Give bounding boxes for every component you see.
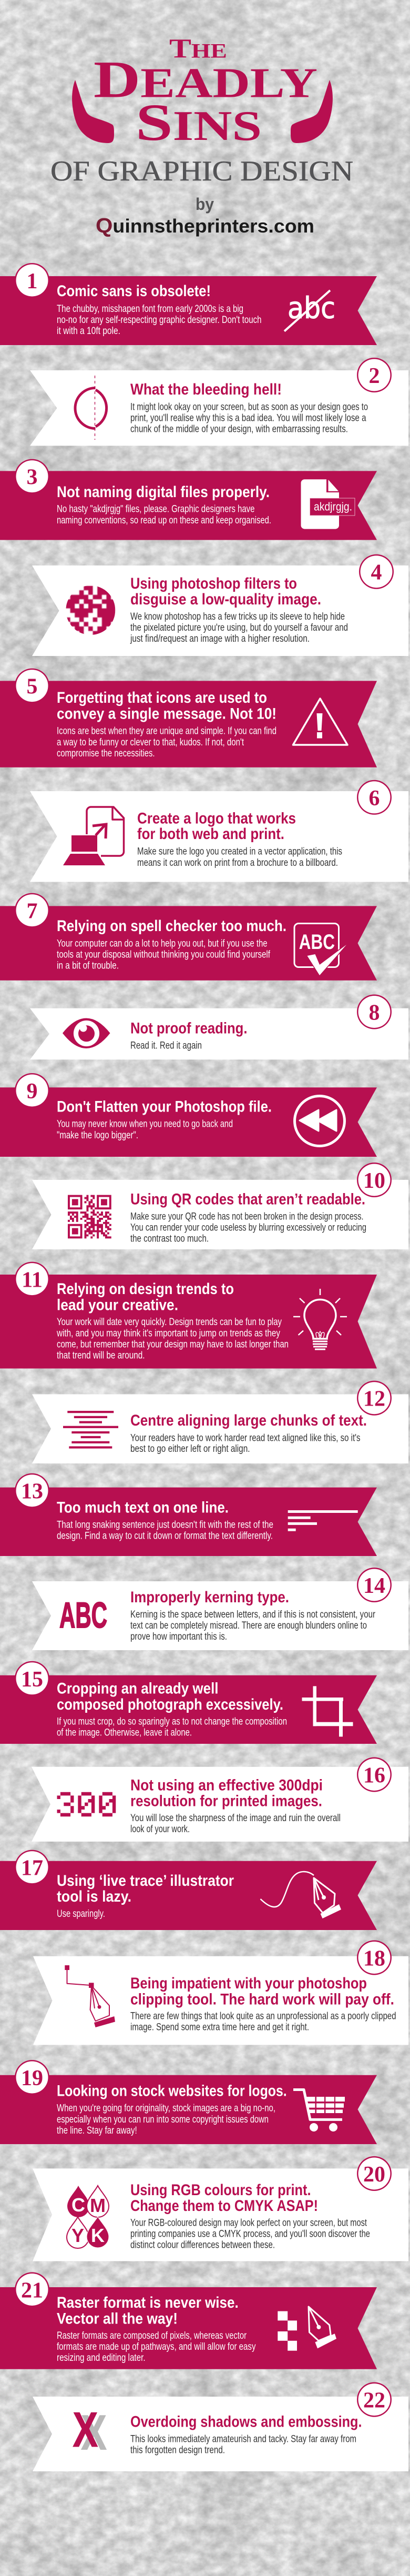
- heading: Centre aligning large chunks of text.: [130, 1412, 367, 1429]
- body text: Raster formats are composed of pixels, whereas vector: [57, 2330, 247, 2341]
- number badge: [359, 554, 394, 589]
- number badge: [15, 459, 49, 494]
- icon: CMYK ink drops: M: [90, 2195, 106, 2216]
- icon: centred text lines: [63, 1411, 118, 1449]
- panel: sin 16: [32, 1757, 408, 1842]
- icon: X with drop shadow: X: [81, 2405, 107, 2460]
- body text: [57, 2103, 275, 2136]
- body text: just find/request an image with a higher resolution.: [130, 633, 310, 644]
- body text: image. Spend some extra time here and get it right.: [130, 2022, 309, 2033]
- number badge: [357, 1163, 392, 1197]
- body text: [130, 401, 368, 435]
- number badge: [357, 1940, 392, 1975]
- heading: Using ‘live trace’ illustrator: [57, 1872, 234, 1890]
- heading: [57, 689, 276, 722]
- panel: sin 3: [0, 459, 377, 540]
- number badge: [15, 1473, 49, 1508]
- ribbon: [30, 1008, 408, 1059]
- subtitle: OF GRAPHIC DESIGN: [50, 155, 353, 187]
- byline: company: Quinnstheprinters.com: [96, 214, 314, 237]
- body text: tools at your disposal without thinking you could find yourself: [57, 948, 270, 960]
- panel: sin 17: [0, 1850, 377, 1930]
- icon: vector pen: [309, 2307, 336, 2348]
- body text: Use sparingly.: [57, 1908, 105, 1920]
- heading: Don't Flatten your Photoshop file.: [57, 1098, 272, 1115]
- ribbon: [0, 906, 377, 981]
- body text: design. Find a way to cut it down or format the text differently.: [57, 1530, 273, 1541]
- number badge: 11: [22, 1268, 43, 1292]
- panel: sin 22: [33, 2382, 408, 2471]
- number badge: 19: [21, 2066, 43, 2090]
- heading: Being impatient with your photoshop: [130, 1975, 367, 1992]
- heading: Not proof reading.: [130, 1019, 247, 1037]
- body text: formats are made up of pathways, and will allow for easy: [57, 2341, 256, 2352]
- body text: especially when you can run into some copyright issues down: [57, 2114, 269, 2125]
- icon: CMYK ink drops: K: [91, 2225, 105, 2246]
- number badge: 14: [363, 1574, 385, 1598]
- panel: sin 15: [0, 1661, 377, 1744]
- number badge: [15, 263, 49, 298]
- title: The: THE: [169, 34, 227, 64]
- body text: [130, 2433, 356, 2456]
- heading: Relying on spell checker too much.: [57, 917, 286, 935]
- number badge: 6: [369, 786, 380, 811]
- panel: sin 11: [0, 1262, 377, 1369]
- body text: [57, 1118, 233, 1141]
- heading: disguise a low-quality image.: [130, 591, 321, 608]
- icon: clipping pen path: [65, 1965, 115, 2027]
- body text: the line. Stay far away!: [57, 2125, 137, 2136]
- number badge: [357, 2156, 392, 2191]
- heading: composed photograph excessively.: [57, 1696, 283, 1713]
- body text: that trend will be around.: [57, 1350, 145, 1361]
- panel: sin 18: [33, 1940, 408, 2045]
- body text: Your computer can do a lot to help you out, but if you use the: [57, 937, 267, 949]
- body text: means it can work on print from a brochure to a billboard.: [137, 857, 338, 868]
- body text: No hasty "akdjrgjg" files, please. Graphic designers have: [57, 503, 254, 514]
- ribbon: [0, 1861, 377, 1930]
- ribbon: [0, 2287, 377, 2369]
- body text: it with a 10ft pole.: [57, 325, 120, 337]
- icon: monitor and document: [63, 807, 124, 865]
- body text: We know photoshop has a few tricks up its sleeve to help hide: [130, 611, 345, 622]
- icon: X with drop shadow: X: [73, 2402, 98, 2457]
- heading: Forgetting that icons are used to: [57, 689, 267, 706]
- ribbon: [30, 791, 408, 882]
- body text: [130, 2011, 396, 2033]
- heading: [57, 1280, 234, 1314]
- ribbon: [0, 1488, 377, 1556]
- body text: [57, 1519, 273, 1541]
- body text: [130, 611, 348, 644]
- icon: badly named file: akdjrgjg.: [314, 500, 352, 513]
- body text: with, and you may think it's important to jump on trends as they: [56, 1327, 280, 1339]
- body text: If you must crop, do so sparingly as to not change the composition: [57, 1716, 287, 1728]
- body text: You may never know when you need to go back and: [57, 1118, 233, 1129]
- heading: convey a single message. Not 10!: [57, 705, 276, 722]
- number badge: [357, 780, 392, 815]
- body text: [130, 2217, 370, 2251]
- number badge: 15: [21, 1668, 43, 1692]
- heading: [57, 2294, 239, 2327]
- panel: sin 10: [32, 1163, 408, 1249]
- heading: Vector all the way!: [57, 2310, 178, 2327]
- body text: distinct colour differences between these.: [130, 2239, 275, 2251]
- number badge: 21: [21, 2279, 43, 2303]
- heading: Using RGB colours for print.: [130, 2181, 311, 2199]
- icon: pixel 300: [57, 1794, 116, 1815]
- body text: no-no for any self-respecting graphic designer. Don't touch: [57, 314, 262, 326]
- ribbon: [32, 1394, 408, 1463]
- ribbon: [0, 471, 377, 540]
- heading: [130, 1776, 323, 1810]
- number badge: [357, 1757, 392, 1792]
- heading: [137, 810, 296, 843]
- icon: bleed circle: [75, 376, 107, 440]
- heading: for both web and print.: [137, 825, 284, 843]
- body text: Make sure the logo you created in a vector application, this: [137, 846, 342, 857]
- heading: Change them to CMYK ASAP!: [130, 2197, 318, 2215]
- icon: long text lines: [288, 1510, 358, 1531]
- ribbon: [0, 1087, 377, 1157]
- heading: [57, 1872, 234, 1905]
- number badge: [357, 1381, 392, 1416]
- icon: right horn: [291, 80, 333, 143]
- number badge: [357, 1568, 392, 1602]
- body text: [57, 503, 271, 526]
- heading: Relying on design trends to: [57, 1280, 234, 1298]
- panel: sin 21: [0, 2272, 377, 2369]
- panel: sin 6: [30, 780, 408, 882]
- body text: Read it. Red it again: [130, 1039, 202, 1051]
- heading: Using photoshop filters to: [130, 575, 297, 592]
- number badge: 8: [369, 1001, 380, 1025]
- body text: of the image. Otherwise, leave it alone.: [57, 1727, 192, 1739]
- number badge: [15, 1850, 49, 1885]
- icon: warning triangle: [293, 699, 347, 745]
- icon: badly kerned ABC: ABC: [59, 1595, 107, 1635]
- body text: chunk of the middle of your design, with embarrassing results.: [130, 423, 348, 435]
- ribbon: [0, 276, 377, 345]
- icon: pixelated image: [66, 588, 116, 633]
- number badge: [357, 2382, 392, 2417]
- number badge: [15, 1262, 49, 1297]
- ribbon: [32, 1180, 408, 1249]
- icon: CMYK ink drops: [67, 2186, 109, 2248]
- panel: sin 12: [32, 1381, 408, 1463]
- number badge: [15, 1661, 49, 1696]
- number badge: 1: [26, 269, 38, 294]
- heading: tool is lazy.: [57, 1888, 131, 1905]
- body text: [57, 303, 262, 337]
- body text: That long snaking sentence just doesn't fit with the rest of the: [57, 1519, 273, 1531]
- number badge: [15, 2272, 49, 2307]
- body text: this forgotten design trend.: [130, 2444, 225, 2456]
- panel: sin 14: [32, 1568, 408, 1650]
- body text: [57, 2330, 256, 2363]
- number badge: 4: [371, 561, 382, 585]
- heading: Improperly kerning type.: [130, 1589, 289, 1606]
- number badge: [15, 1073, 49, 1108]
- panel: sin 2: [30, 358, 408, 446]
- number badge: 7: [26, 900, 38, 924]
- number badge: [15, 669, 49, 703]
- body text: You will lose the sharpness of the image and ruin the overall: [130, 1812, 341, 1824]
- body text: look of your work.: [130, 1823, 190, 1835]
- body text: [130, 1812, 341, 1835]
- icon: pen tool with curve: [261, 1872, 341, 1918]
- number badge: 12: [363, 1387, 385, 1411]
- body text: [130, 1609, 375, 1642]
- heading: Create a logo that works: [137, 810, 296, 827]
- ribbon: [33, 1956, 408, 2045]
- title block: [50, 34, 353, 237]
- body text: the contrast too much.: [130, 1233, 209, 1245]
- heading: Not naming digital files properly.: [57, 483, 270, 501]
- panel: sin 5: [0, 669, 377, 767]
- heading: [130, 2181, 318, 2215]
- body text: [130, 1210, 366, 1245]
- number badge: [15, 2060, 49, 2095]
- body text: come, but remember that your design may have to last longer than: [57, 1339, 289, 1350]
- title: Sins: SINS: [136, 93, 262, 151]
- panel: sin 9: [0, 1073, 377, 1157]
- icon: raster pixels: [278, 2311, 297, 2351]
- heading: Not using an effective 300dpi: [130, 1776, 323, 1794]
- ribbon: [33, 2168, 408, 2261]
- icon: struck-through abc: abc: [288, 291, 335, 326]
- number badge: 5: [26, 675, 38, 699]
- title: Deadly: DEADLY: [94, 50, 317, 109]
- icon: left horn: [72, 80, 114, 143]
- icon: crop tool: [302, 1686, 353, 1736]
- ribbon: [32, 1767, 408, 1842]
- number badge: 3: [26, 466, 38, 490]
- panel: sin 1: [0, 263, 377, 345]
- number badge: 17: [21, 1856, 43, 1881]
- body text: When you're going for originality, stock images are a big no-no,: [57, 2103, 275, 2114]
- heading: Looking on stock websites for logos.: [57, 2082, 287, 2099]
- ribbon: [33, 2397, 408, 2471]
- icon: eye: [63, 1018, 110, 1048]
- body text: a way to be funny or clever to that, kudos. If not, don't: [57, 736, 244, 748]
- heading: What the bleeding hell!: [130, 381, 282, 398]
- body text: Your work will date very quickly. Design trends can be fun to play: [57, 1316, 282, 1328]
- icon: QR code: [68, 1196, 111, 1237]
- ribbon: [0, 681, 377, 767]
- icon: badly named file: [301, 479, 355, 529]
- ribbon: [0, 2075, 377, 2144]
- heading: [130, 575, 321, 608]
- body text: "make the logo bigger".: [57, 1129, 138, 1141]
- number badge: [15, 893, 49, 928]
- heading: [130, 1975, 394, 2008]
- body text: [57, 937, 270, 971]
- number badge: 2: [369, 364, 380, 388]
- number badge: [357, 358, 392, 392]
- number badge: 13: [21, 1480, 43, 1504]
- panel: sin 4: [32, 554, 408, 656]
- body text: prove how important this is.: [130, 1631, 227, 1642]
- heading: lead your creative.: [57, 1296, 178, 1314]
- body text: [130, 1432, 361, 1454]
- body text: resizing and editing later.: [57, 2352, 146, 2363]
- number badge: [357, 994, 392, 1029]
- body text: [57, 725, 276, 759]
- heading: Overdoing shadows and embossing.: [130, 2413, 362, 2430]
- panel: sin 7: [0, 893, 377, 981]
- panel: sin 8: [30, 994, 408, 1059]
- body text: in a bit of trouble.: [57, 959, 119, 971]
- body text: the pixelated picture you're using, but do yourself a favour and: [130, 622, 348, 633]
- body text: [57, 1716, 287, 1739]
- number badge: 10: [363, 1169, 385, 1193]
- number badge: 20: [363, 2163, 385, 2187]
- panel: sin 20: [33, 2156, 408, 2261]
- ribbon: [30, 370, 408, 446]
- icon: shopping cart: [293, 2089, 345, 2131]
- panel: sin 19: [0, 2060, 377, 2144]
- icon: CMYK ink drops: C: [71, 2194, 85, 2216]
- heading: Raster format is never wise.: [57, 2294, 239, 2311]
- body text: [56, 1316, 289, 1361]
- heading: Cropping an already well: [57, 1680, 219, 1697]
- heading: Comic sans is obsolete!: [57, 282, 211, 300]
- body text: [137, 846, 342, 868]
- ribbon: [0, 1675, 377, 1744]
- number badge: 22: [363, 2389, 385, 2413]
- body text: naming conventions, so read up on these and keep organised.: [57, 514, 271, 526]
- heading: Too much text on one line.: [57, 1499, 229, 1516]
- number badge: 9: [26, 1079, 38, 1104]
- icon: light bulb: [293, 1289, 347, 1349]
- body text: The chubby, misshapen font from early 2000s is a big: [57, 303, 243, 315]
- icon: spell check: ABC: [299, 931, 335, 954]
- ribbon: [32, 1581, 408, 1650]
- number badge: 18: [363, 1946, 385, 1971]
- heading: Using QR codes that aren’t readable.: [130, 1190, 365, 1208]
- icon: CMYK ink drops: Y: [71, 2225, 84, 2246]
- number badge: 16: [363, 1763, 385, 1787]
- ribbon: [0, 1275, 377, 1369]
- panel: sin 13: [0, 1473, 377, 1556]
- heading: [57, 1680, 283, 1713]
- body text: compromise the necessities.: [57, 747, 155, 759]
- body text: Icons are best when they are unique and simple. If you can find: [57, 725, 276, 736]
- body text: best to go either left or right align.: [130, 1443, 250, 1454]
- icon: spell check: [294, 924, 346, 975]
- byline: by: by: [196, 195, 214, 214]
- heading: resolution for printed images.: [130, 1793, 322, 1810]
- icon: rewind: [294, 1096, 345, 1146]
- ribbon: [32, 565, 408, 656]
